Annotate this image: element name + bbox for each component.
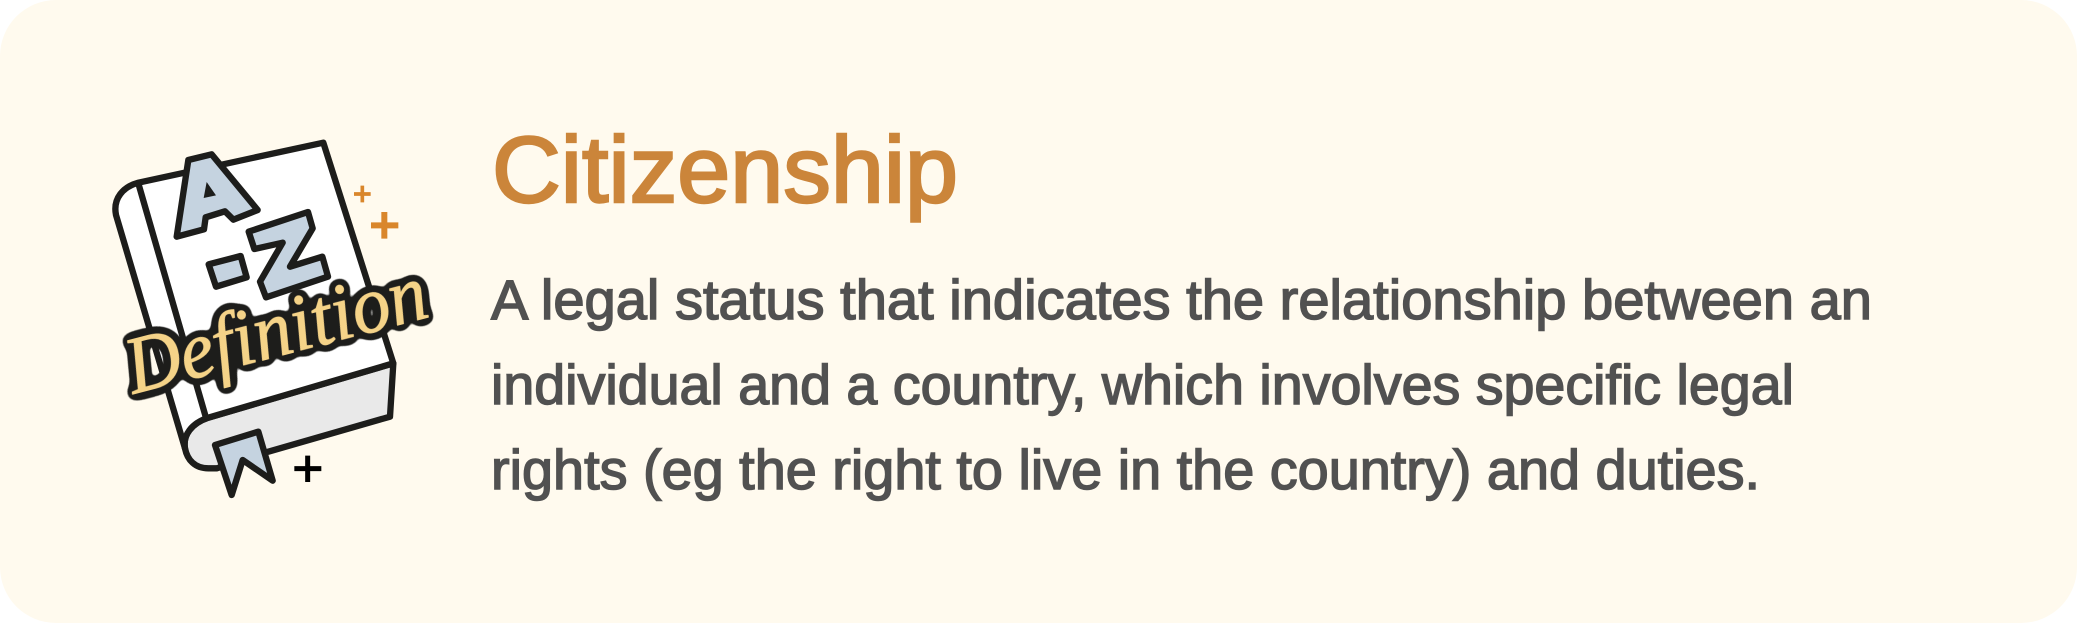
icon: definition book [115,143,436,495]
text line 1: A legal status that indicates the relationship between an [491,268,1872,331]
text line 2: individual and a country, which involves specific legal [491,353,1794,416]
icon: letter A [177,154,258,237]
icon: Definition script label: Definition [115,249,436,412]
icon: letter A counter [204,182,216,198]
icon: book cover [115,143,393,448]
heading: Citizenship: Citizenship [492,117,958,222]
text line 3: rights (eg the right to live in the country) and duties. [491,438,1760,501]
icon: small orange plus [354,186,371,202]
icon: large orange plus [371,212,398,239]
icon: dash [209,256,247,287]
text block: definition [491,268,1872,501]
icon: bookmark [215,432,273,495]
icon: letter Z [249,212,328,297]
icon: spine line [138,183,206,417]
icon: black plus [294,456,321,482]
icon: grey page block [185,363,393,468]
